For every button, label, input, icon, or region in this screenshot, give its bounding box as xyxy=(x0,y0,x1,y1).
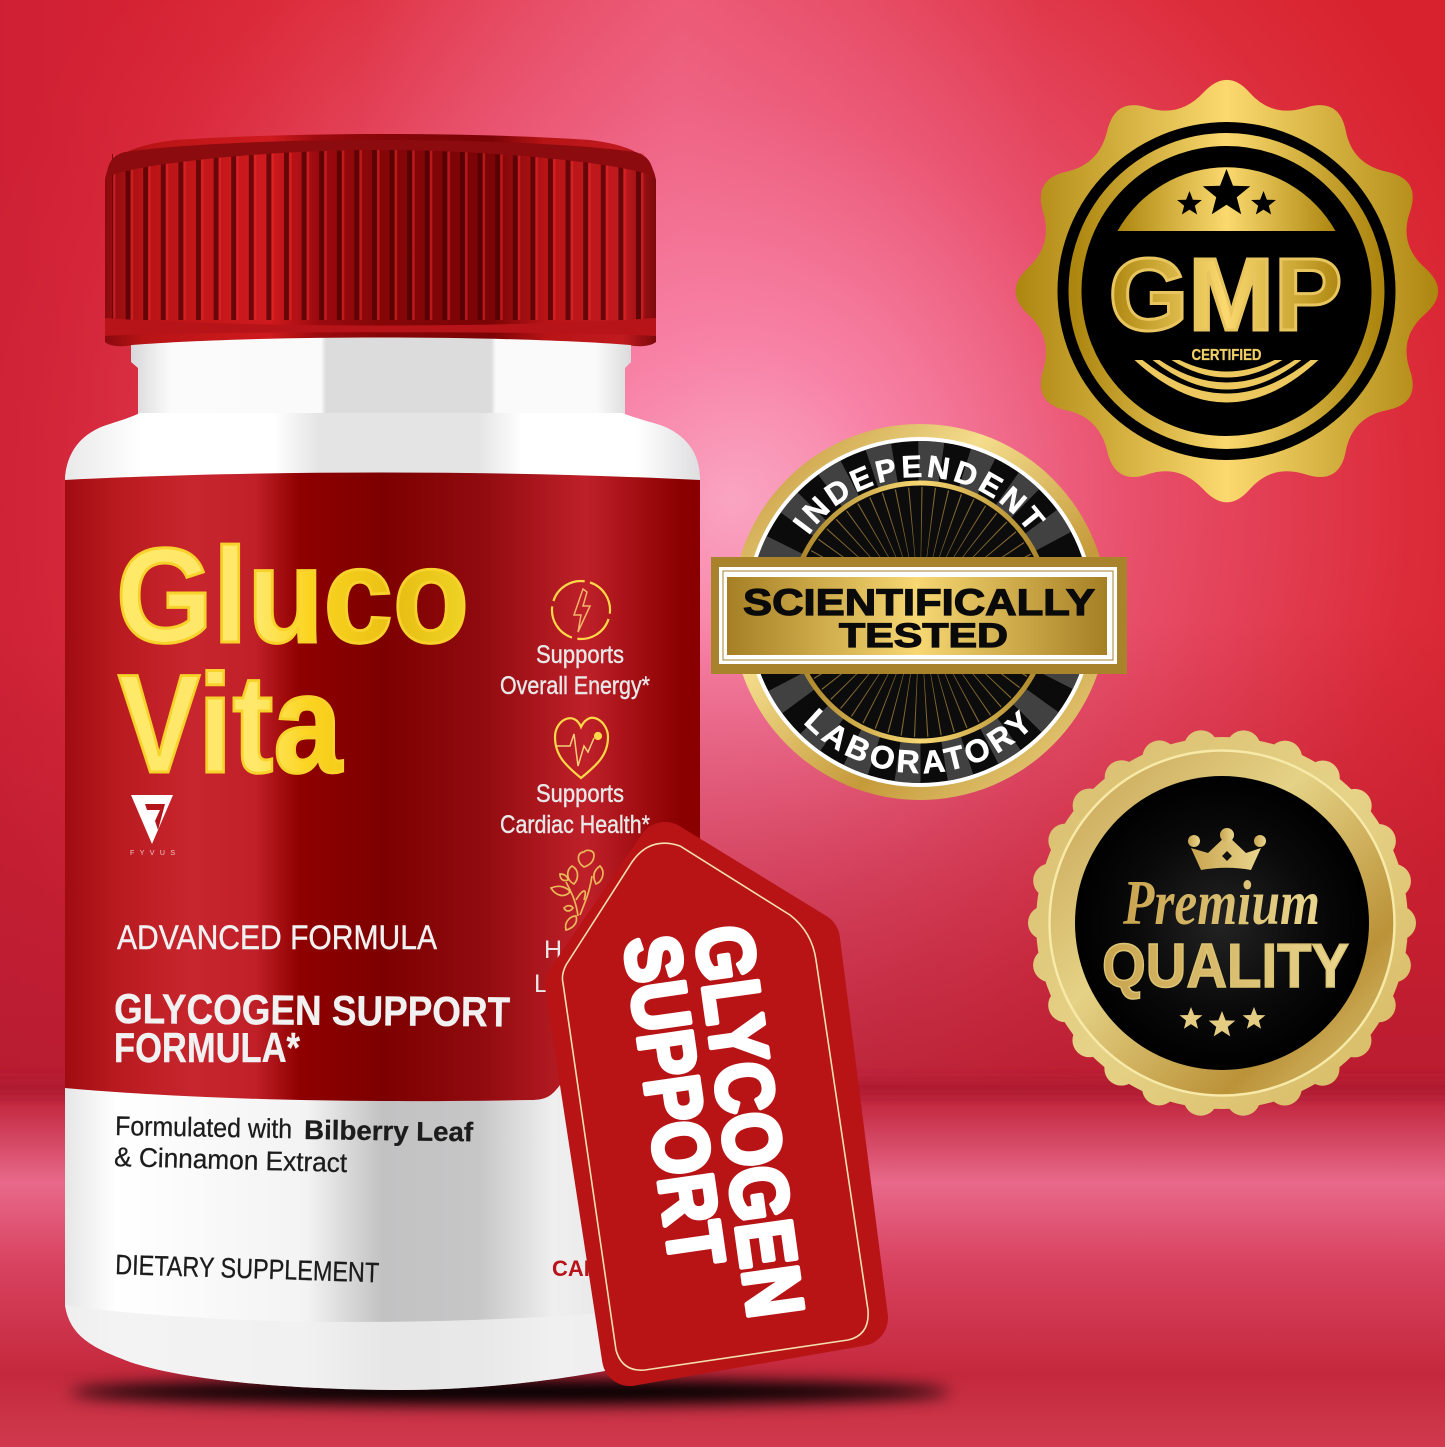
icon: tree of leaves xyxy=(551,850,603,930)
gold rays xyxy=(838,530,1002,694)
formula text: GLYCOGEN SUPPORT xyxy=(114,985,511,1035)
gold rim xyxy=(732,424,1108,800)
black centre xyxy=(1075,776,1369,1070)
dome with stars xyxy=(1118,167,1336,231)
gold seal xyxy=(1016,80,1438,502)
icon: energy bolt xyxy=(544,573,618,647)
formula text: ADVANCED FORMULA xyxy=(117,919,437,957)
icon: crown xyxy=(1188,828,1266,870)
curved lines xyxy=(1134,360,1318,402)
benefit: partly hidden by tag xyxy=(534,850,603,998)
formula text: FORMULA* xyxy=(114,1024,301,1071)
bottle shoulder xyxy=(65,413,700,480)
lower white label text: DIETARY SUPPLEMENT xyxy=(115,1249,380,1288)
bottle body xyxy=(65,413,700,1390)
tag text xyxy=(607,920,820,1323)
lower white label text: Formulated with xyxy=(115,1111,292,1144)
ribbon: SCIENTIFICALLY xyxy=(743,582,1095,623)
badge: GMP certified xyxy=(1016,80,1438,502)
grey segments xyxy=(770,462,1070,762)
bottle base shine xyxy=(65,1305,700,1390)
icon: heart with pulse xyxy=(555,718,608,778)
benefit: overall energy: Supports xyxy=(536,641,624,669)
hang tag: glycogen support xyxy=(562,843,868,1370)
bottle neck xyxy=(131,335,631,420)
lower white label text: Bilberry Leaf xyxy=(304,1115,474,1147)
bottle cap xyxy=(105,134,656,346)
scalloped gold seal xyxy=(1036,737,1408,1109)
ribbon: TESTED xyxy=(839,617,1008,655)
lower white label text xyxy=(114,1111,598,1288)
benefit: overall energy xyxy=(500,573,650,700)
logo: fyvus xyxy=(130,795,175,857)
benefit: overall energy: Overall Energy* xyxy=(500,672,650,700)
tag text: SUPPORT xyxy=(607,930,742,1271)
benefit: cardiac health: Cardiac Health* xyxy=(500,811,650,839)
GMP text: GMP xyxy=(1108,237,1342,352)
brand name: Gluco xyxy=(116,520,469,671)
premium script: Premium xyxy=(1122,867,1320,938)
lower white label text: CAP xyxy=(552,1256,598,1281)
benefit: partly hidden by tag: H xyxy=(544,936,562,964)
certified text: CERTIFIED xyxy=(1192,347,1262,364)
ribbon xyxy=(711,557,1127,674)
logo: fyvus: FYVUS xyxy=(130,850,175,857)
independent text: INDEPENDENT xyxy=(792,455,1046,534)
brand name xyxy=(116,520,469,802)
badge: scientifically tested xyxy=(711,424,1127,800)
brand name: Vita xyxy=(118,645,343,802)
benefit: partly hidden by tag: L xyxy=(534,970,548,998)
benefit: cardiac health: Supports xyxy=(536,780,624,808)
product bottle xyxy=(65,134,700,1390)
formula text xyxy=(114,919,511,1071)
red label xyxy=(65,472,700,1101)
benefit: cardiac health xyxy=(500,718,650,839)
tag text: GLYCOGEN xyxy=(678,920,820,1323)
badge: premium quality xyxy=(1036,737,1408,1109)
three stars xyxy=(1180,1007,1265,1036)
bottle shadow xyxy=(70,1379,950,1405)
lower white label text: & Cinnamon Extract xyxy=(114,1142,348,1178)
quality text: QUALITY xyxy=(1102,932,1349,1001)
laboratory text: LABORATORY xyxy=(804,708,1028,774)
